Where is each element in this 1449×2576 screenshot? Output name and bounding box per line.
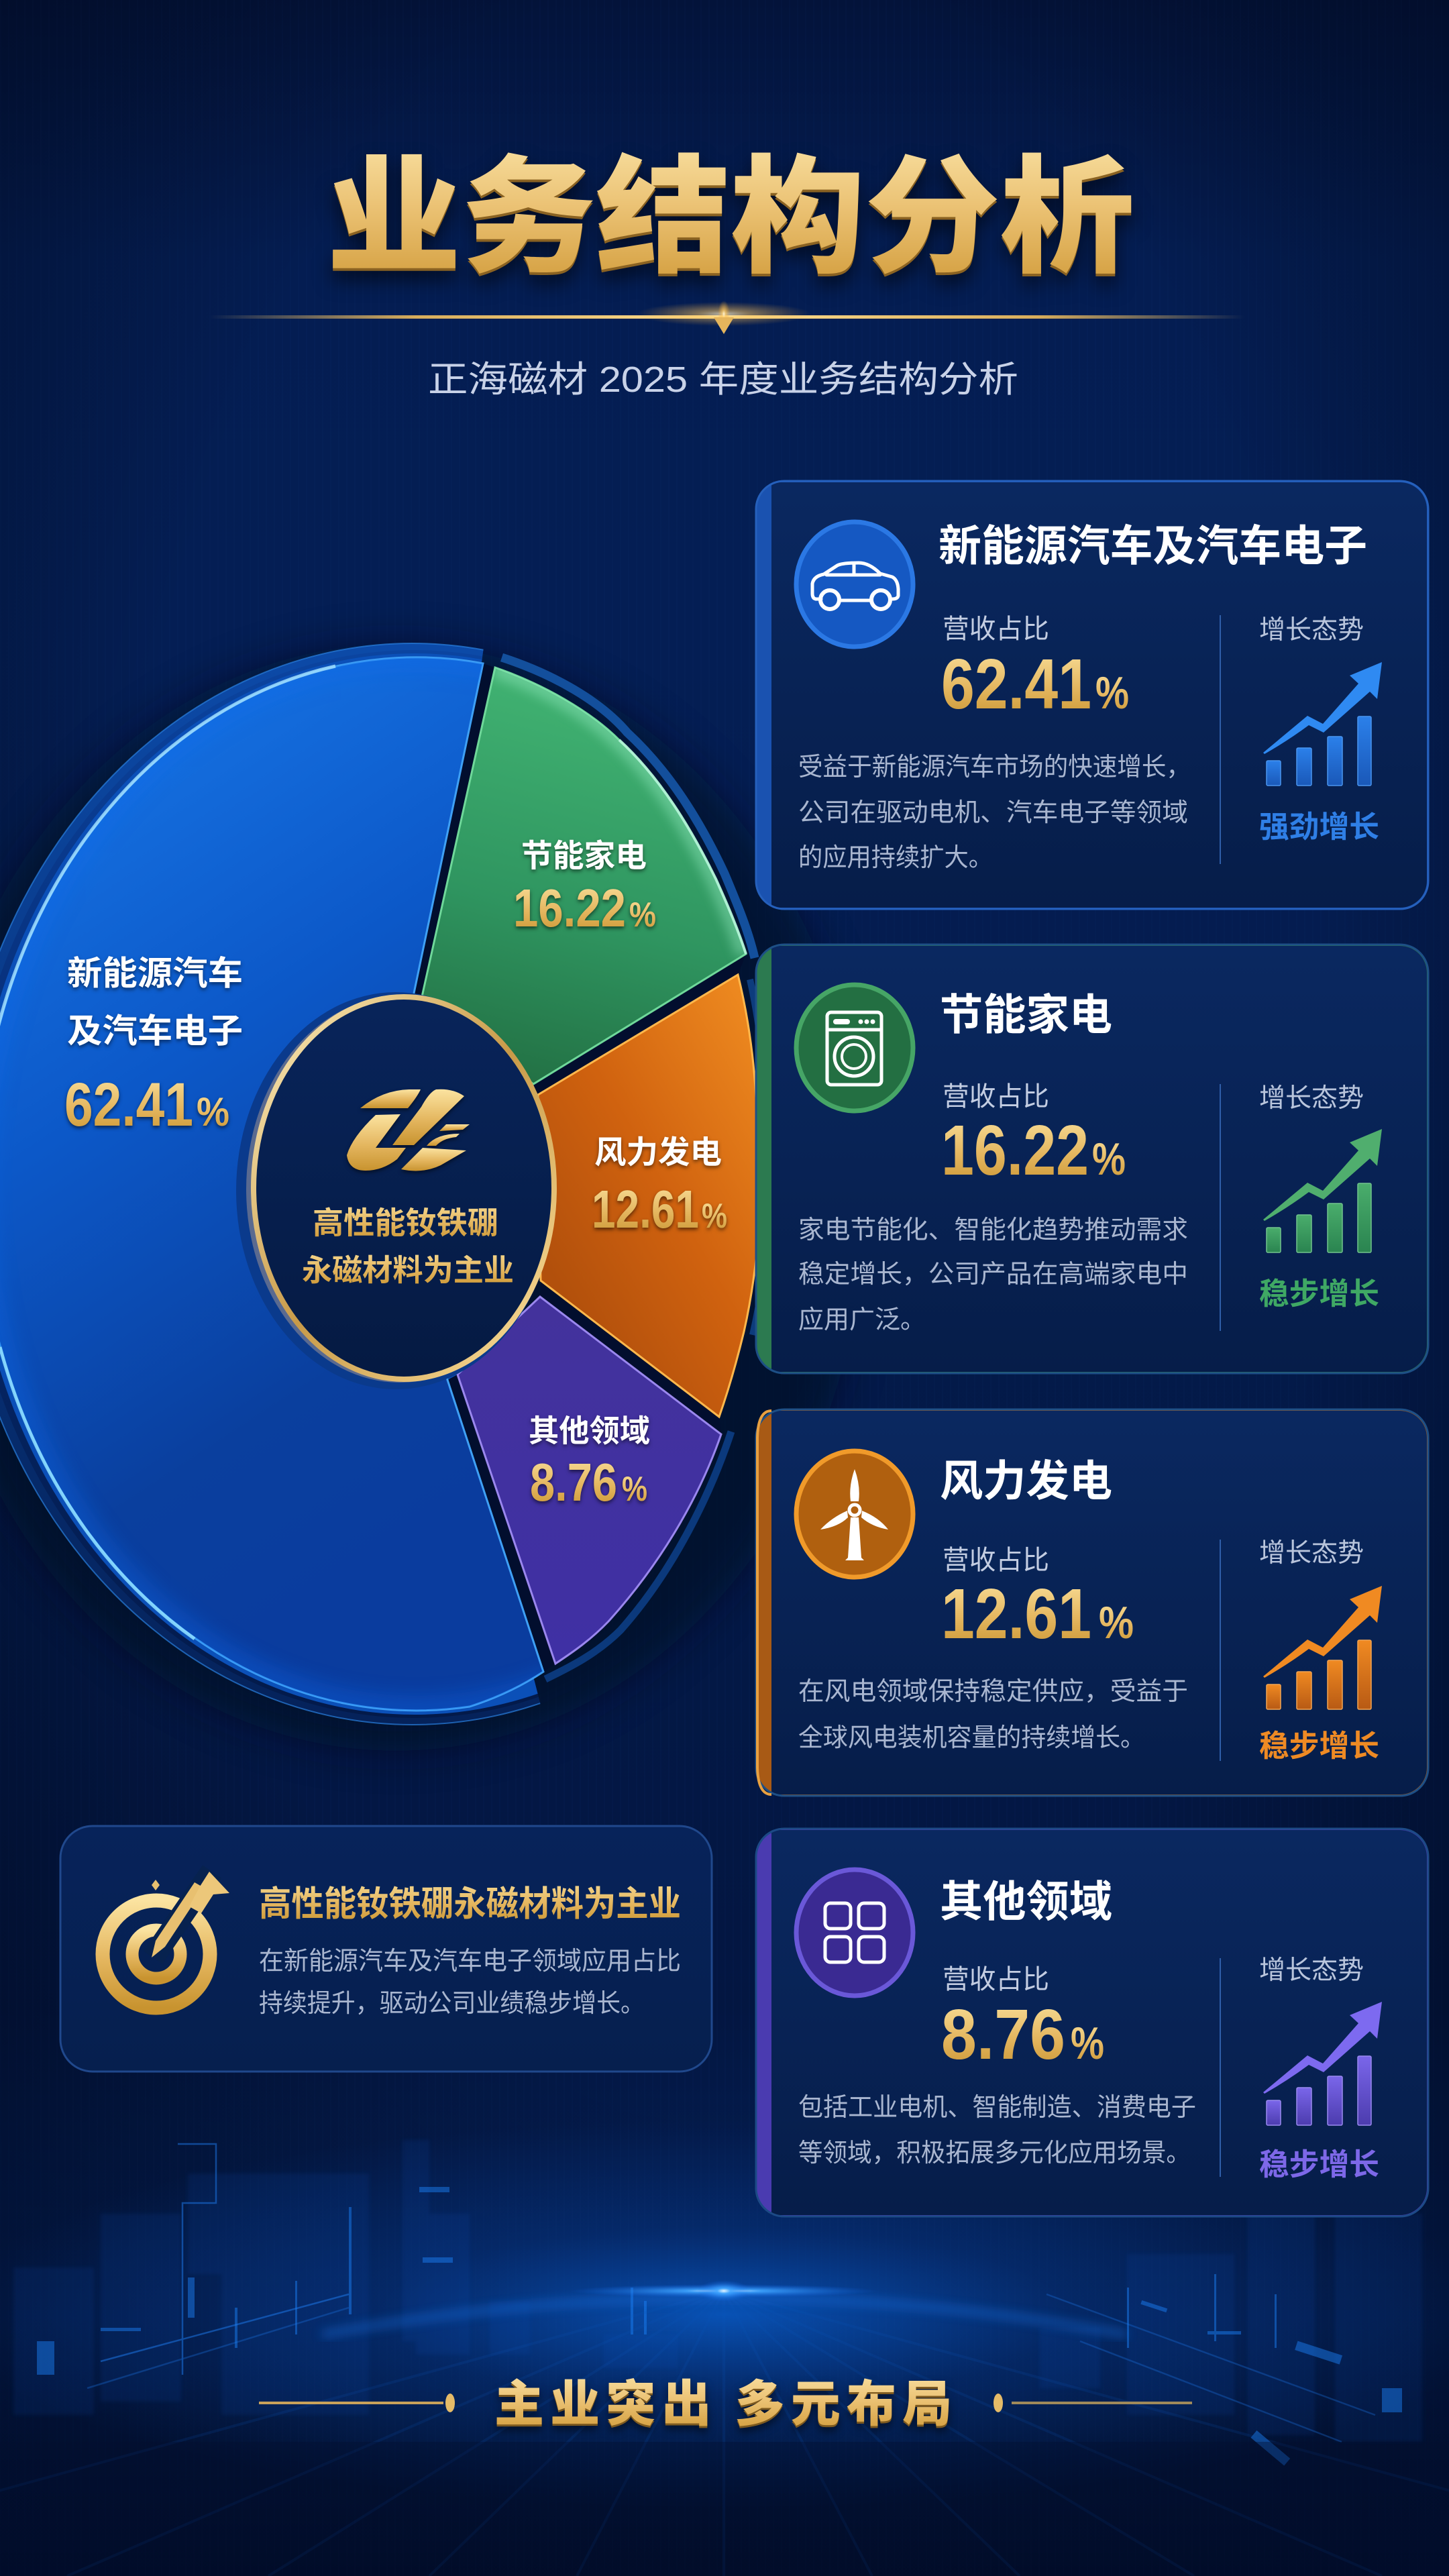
heading: 节能家电 bbox=[940, 981, 1112, 1042]
slice: energy saving appliances bbox=[421, 667, 746, 1084]
trend text: 强劲增长 bbox=[1259, 802, 1379, 846]
label: wind power: 12.61 bbox=[592, 1179, 699, 1239]
description bbox=[798, 746, 1191, 873]
revenue label: 营收占比 bbox=[943, 1957, 1049, 1996]
description bbox=[259, 1940, 681, 2019]
icon: wind turbine bbox=[796, 1451, 913, 1577]
label: new energy vehicles: 新能源汽车 bbox=[67, 947, 243, 995]
label: energy saving appliances: 16.22 bbox=[513, 878, 626, 938]
trend text: 稳步增长 bbox=[1259, 1721, 1379, 1765]
label: wind power bbox=[592, 1126, 727, 1239]
description: 公司在驱动电机、汽车电子等领域 bbox=[798, 792, 1188, 828]
description: 等领域，积极拓展多元化应用场景。 bbox=[798, 2132, 1191, 2169]
heading: 高性能钕铁硼永磁材料为主业 bbox=[259, 1876, 681, 1926]
chart: steady growth green bbox=[1263, 1129, 1382, 1252]
label: wind power: 风力发电 bbox=[594, 1126, 722, 1173]
heading: 新能源汽车及汽车电子 bbox=[938, 512, 1367, 574]
panel: core business summary bbox=[60, 1826, 712, 2072]
blue slice upper highlight bbox=[0, 666, 335, 1081]
panel: new energy vehicles bbox=[756, 481, 1428, 909]
icon: target with arrow bbox=[103, 1872, 229, 2008]
label: new energy vehicles bbox=[64, 947, 243, 1139]
trend label: 增长态势 bbox=[1259, 1532, 1364, 1570]
trend label: 增长态势 bbox=[1259, 1077, 1364, 1115]
center hub bbox=[236, 992, 555, 1389]
revenue label: 营收占比 bbox=[943, 1075, 1049, 1114]
label: other fields bbox=[529, 1407, 650, 1512]
description: 持续提升，驱动公司业绩稳步增长。 bbox=[259, 1982, 645, 2019]
label: energy saving appliances: % bbox=[629, 896, 656, 934]
heading: 其他领域 bbox=[940, 1868, 1112, 1929]
chart: strong growth bbox=[1263, 662, 1382, 786]
description: 稳定增长，公司产品在高端家电中 bbox=[798, 1253, 1188, 1290]
slice: wind power bbox=[538, 975, 760, 1417]
label: wind power: % bbox=[702, 1197, 727, 1236]
label: energy saving appliances bbox=[513, 830, 656, 938]
trend text: 稳步增长 bbox=[1259, 1269, 1379, 1313]
revenue value: 16.22 bbox=[941, 1111, 1089, 1190]
revenue label: 营收占比 bbox=[943, 607, 1049, 646]
description bbox=[798, 2086, 1196, 2169]
rim of green slice bbox=[502, 657, 755, 958]
label: other fields: % bbox=[622, 1470, 647, 1509]
company logo bbox=[347, 1089, 470, 1171]
blue slice lower highlight bbox=[0, 1347, 195, 1639]
trend label: 增长态势 bbox=[1259, 1949, 1364, 1987]
subtitle: 正海磁材 2025 年度业务结构分析 bbox=[428, 360, 1018, 400]
revenue value: 62.41 bbox=[941, 645, 1091, 724]
icon: grid squares bbox=[796, 1870, 913, 1996]
footer slogan bbox=[259, 2364, 1192, 2436]
rim of purple slice bbox=[545, 1432, 731, 1679]
chart shadow and rim bbox=[0, 643, 870, 1751]
trend text: 稳步增长 bbox=[1259, 2140, 1379, 2184]
panel: energy saving appliances bbox=[756, 945, 1428, 1373]
heading: 风力发电 bbox=[940, 1447, 1112, 1509]
panel: wind power bbox=[756, 1409, 1428, 1796]
revenue label: 营收占比 bbox=[943, 1538, 1049, 1577]
label: new energy vehicles: % bbox=[197, 1089, 229, 1134]
revenue value: % bbox=[1099, 1597, 1134, 1648]
description: 包括工业电机、智能制造、消费电子 bbox=[798, 2086, 1196, 2123]
stripe highlight bbox=[757, 1411, 771, 1794]
chart: steady growth orange bbox=[1263, 1586, 1382, 1709]
hub text line 1: 高性能钕铁硼 bbox=[313, 1199, 498, 1243]
description: 应用广泛。 bbox=[798, 1299, 926, 1336]
title: 业务结构分析 bbox=[327, 114, 1134, 299]
blue slice inner glow bbox=[0, 657, 543, 1711]
bottom city skyline backdrop bbox=[0, 2120, 1449, 2576]
description: 受益于新能源汽车市场的快速增长， bbox=[798, 746, 1191, 783]
donut chart bbox=[0, 643, 870, 1751]
revenue value: 8.76 bbox=[941, 1995, 1065, 2074]
title divider bbox=[209, 301, 1244, 334]
chart: steady growth purple bbox=[1263, 2002, 1382, 2125]
label: other fields: 其他领域 bbox=[529, 1407, 650, 1451]
panel: other fields bbox=[756, 1829, 1428, 2216]
icon: washing machine bbox=[796, 985, 913, 1111]
rim of orange slice bbox=[750, 979, 769, 1335]
description bbox=[798, 1209, 1188, 1336]
footer slogan: 主业突出 多元布局 bbox=[494, 2364, 952, 2436]
revenue value: % bbox=[1071, 2018, 1104, 2069]
label: energy saving appliances: 节能家电 bbox=[521, 830, 647, 876]
label: new energy vehicles: 及汽车电子 bbox=[67, 1004, 243, 1053]
label: other fields: 8.76 bbox=[530, 1452, 617, 1512]
gaps between slices bbox=[413, 663, 746, 1672]
slice: other fields bbox=[458, 1297, 721, 1664]
label: new energy vehicles: 62.41 bbox=[64, 1071, 193, 1139]
slice: new energy vehicles bbox=[0, 657, 543, 1711]
description bbox=[798, 1670, 1188, 1754]
description: 全球风电装机容量的持续增长。 bbox=[798, 1717, 1145, 1754]
revenue value: % bbox=[1095, 667, 1129, 718]
icon: car bbox=[796, 522, 913, 647]
description: 的应用持续扩大。 bbox=[798, 837, 993, 873]
green slice outer glow bbox=[495, 667, 746, 954]
description: 家电节能化、智能化趋势推动需求 bbox=[798, 1209, 1188, 1246]
green slice outer highlight bbox=[619, 740, 746, 954]
revenue value: % bbox=[1092, 1134, 1126, 1185]
hub text line 2: 永磁材料为主业 bbox=[302, 1246, 514, 1289]
description: 在风电领域保持稳定供应，受益于 bbox=[798, 1670, 1188, 1707]
trend label: 增长态势 bbox=[1259, 609, 1364, 647]
revenue value: 12.61 bbox=[941, 1574, 1091, 1654]
description: 在新能源汽车及汽车电子领域应用占比 bbox=[259, 1940, 681, 1977]
